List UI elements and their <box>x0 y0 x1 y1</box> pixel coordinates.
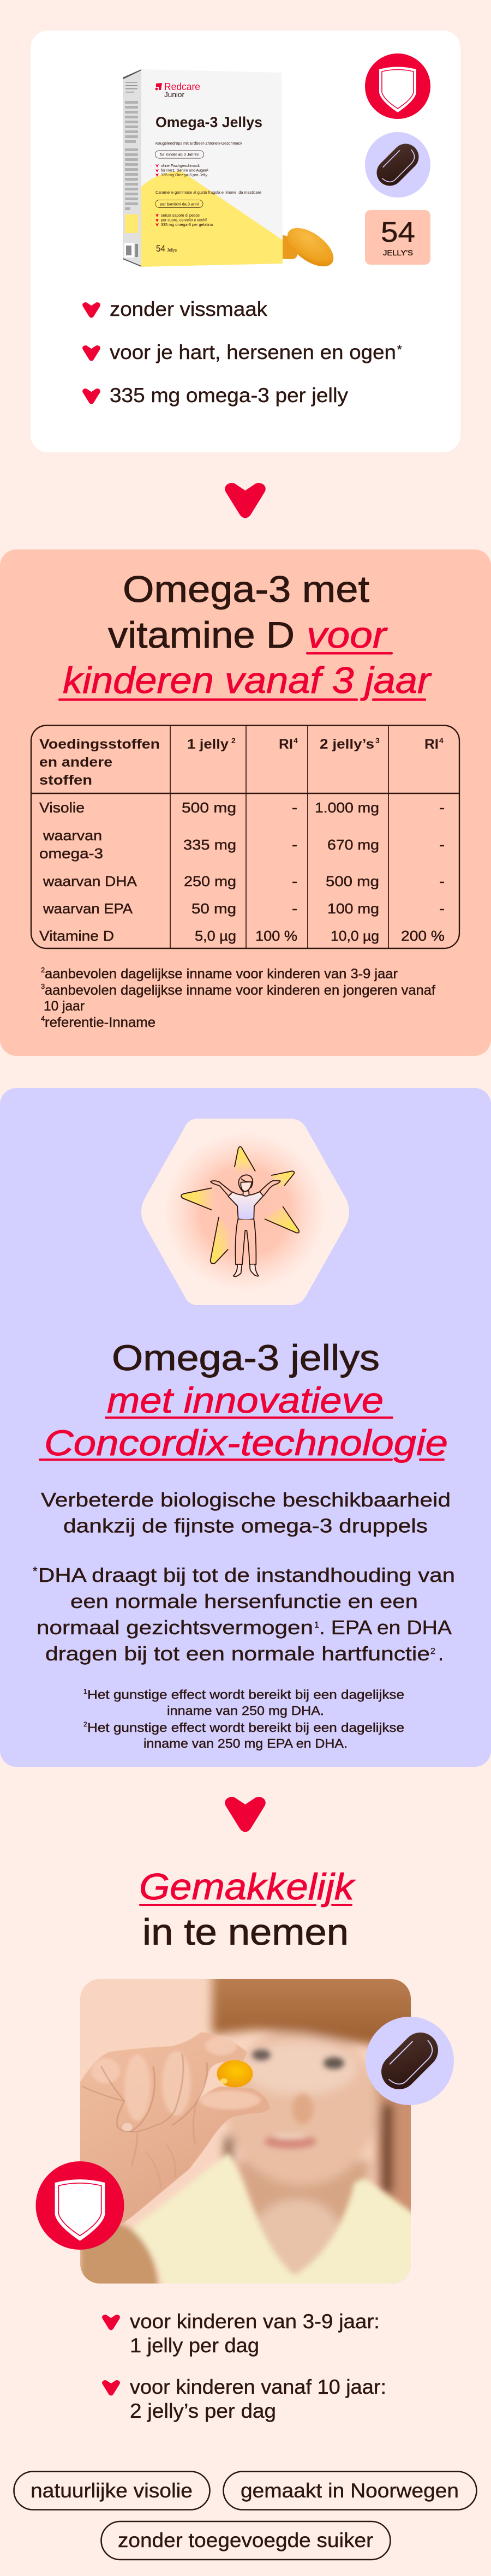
row: visolie: Visolie <box>39 799 85 816</box>
row: EPA: - <box>439 900 445 917</box>
figure <box>211 1175 280 1276</box>
text: DHA claim: dragen bij tot een normale hartfunctie <box>45 1642 430 1665</box>
heading: gemakkelijk in te nemen: in te nemen <box>142 1911 349 1953</box>
icon: hexagon with person and star <box>141 1119 349 1305</box>
row: vitamine D: 5,0 µg <box>195 928 236 944</box>
text: DHA claim: . <box>438 1642 444 1665</box>
row: omega-3: omega-3 <box>39 845 103 862</box>
row: omega-3 <box>39 827 445 862</box>
text: DHA claim: . EPA en DHA <box>319 1616 452 1639</box>
box count <box>156 243 177 254</box>
table header: stoffen <box>39 773 92 788</box>
table footnotes: referentie-Inname <box>45 1015 155 1030</box>
heading: omega-3 met vitamine D: Omega-3 met <box>123 569 369 610</box>
text: DHA claim: * <box>33 1564 38 1578</box>
box title: Omega-3 Jellys <box>155 114 262 130</box>
Italian box text: per cuore, cervello e occhi¹ <box>161 217 207 223</box>
row: EPA: - <box>292 900 297 917</box>
row: EPA <box>43 900 445 917</box>
table header <box>39 736 444 788</box>
table header: RI <box>279 737 293 752</box>
row: visolie: 500 mg <box>182 799 236 816</box>
box count: 54 <box>156 243 165 254</box>
table header: Voedingsstoffen <box>39 737 160 752</box>
Italian box text: 335 mg omega-3 per gelatina <box>161 222 213 227</box>
text: DHA claim: 2 <box>430 1647 435 1656</box>
German box text: für Herz, Gehirn und Augen¹ <box>161 168 208 172</box>
Italian box text: per bambini da 3 anni <box>160 202 199 206</box>
table header: 2 <box>231 736 236 745</box>
footnotes: effect: 1 <box>83 1688 87 1695</box>
icon: jelly badge on photo <box>366 2017 454 2105</box>
row: DHA: waarvan DHA <box>43 873 137 889</box>
row: visolie: - <box>439 799 445 816</box>
heading: omega-3 jellys met innovatieve concordix-technologie: Concordix-technologie <box>44 1423 448 1463</box>
heading: omega-3 met vitamine D: voor <box>307 614 388 656</box>
row: visolie <box>39 799 445 816</box>
row: DHA: 250 mg <box>184 873 236 889</box>
table header: 4 <box>439 736 444 745</box>
footnotes: effect: inname van 250 mg DHA. <box>167 1704 324 1718</box>
pill: zonder toegevoegde suiker <box>101 2521 391 2560</box>
row: vitamine D: Vitamine D <box>39 928 114 944</box>
row: EPA: 100 mg <box>327 900 379 917</box>
table header: 2 jelly’s <box>320 737 374 752</box>
product box illustration <box>123 69 283 267</box>
table footnotes: aanbevolen dagelijkse inname voor kinderen van 3-9 jaar <box>45 966 398 982</box>
table footnotes: aanbevolen dagelijkse inname voor kinderen en jongeren vanaf <box>45 983 435 998</box>
German box text: Kaugeleedrops mit Erdbeer-Zitronen-Geschmack <box>155 141 242 146</box>
icon: heart divider 2 <box>225 1797 266 1832</box>
text: DHA claim: DHA draagt bij tot de instandhouding van <box>38 1564 455 1586</box>
badge: 54 jelly's: JELLY'S <box>383 248 413 257</box>
table footnotes: 3 <box>41 982 45 990</box>
table header: 1 jelly <box>187 737 229 752</box>
row: EPA: waarvan EPA <box>43 900 133 917</box>
panel: product card <box>31 31 460 452</box>
pill: zonder toegevoegde suiker: zonder toegevoegde suiker <box>118 2529 373 2551</box>
table header: 3 <box>375 736 380 745</box>
row: DHA <box>43 873 445 889</box>
German box text: 335 mg Omega-3 pro Jelly <box>161 172 207 177</box>
icon: shield badge on photo <box>36 2161 124 2250</box>
footnotes: effect <box>83 1687 404 1750</box>
pill: natuurlijke visolie <box>14 2472 209 2510</box>
row: DHA: - <box>439 873 445 889</box>
row: visolie: 1.000 mg <box>315 799 379 816</box>
brand logo: Junior <box>164 90 184 99</box>
row: vitamine D: 10,0 µg <box>331 928 379 944</box>
table footnotes: 2 <box>41 966 45 974</box>
text: bioavailability: dankzij de fijnste omega-3 druppels <box>63 1515 428 1537</box>
text: DHA claim: 1 <box>314 1621 319 1630</box>
heading: omega-3 met vitamine D <box>58 569 432 701</box>
bullet: voor je hart: voor je hart, hersenen en ogen <box>110 341 396 363</box>
bullet: zonder vissmaak: zonder vissmaak <box>110 298 268 320</box>
row: omega-3: - <box>292 836 297 853</box>
bullet: 3-9 jaar dosage <box>102 2310 380 2357</box>
bullet: 3-9 jaar dosage: voor kinderen van 3-9 jaar: <box>130 2310 380 2333</box>
bullet: voor je hart: * <box>397 343 402 356</box>
jelly capsules <box>281 220 340 274</box>
bullet: 335 mg: 335 mg omega-3 per jelly <box>110 384 349 407</box>
Italian box text: senza sapore di pesce <box>161 213 200 218</box>
heading: omega-3 jellys met innovatieve concordix-technologie <box>39 1337 448 1463</box>
heading: omega-3 jellys met innovatieve concordix-technologie: met innovatieve <box>107 1380 384 1420</box>
pill: gemaakt in Noorwegen: gemaakt in Noorwegen <box>241 2479 459 2502</box>
footnotes: effect: Het gunstige effect wordt bereikt bij een dagelijkse <box>87 1687 404 1701</box>
heading: omega-3 met vitamine D: vitamine D <box>108 614 295 656</box>
row: omega-3: waarvan <box>43 827 102 844</box>
heading: omega-3 met vitamine D: kinderen vanaf 3 jaar <box>63 660 432 701</box>
panel: concordix technology <box>0 1088 491 1767</box>
nutrition table <box>31 726 459 948</box>
table header: 4 <box>294 736 298 745</box>
footnotes: effect: 2 <box>83 1720 87 1728</box>
table footnotes <box>41 966 435 1030</box>
text: DHA claim: normaal gezichtsvermogen <box>37 1616 313 1639</box>
Italian box text <box>155 190 261 227</box>
heading: gemakkelijk in te nemen: Gemakkelijk <box>139 1866 356 1908</box>
text: bioavailability: Verbeterde biologische beschikbaarheid <box>41 1489 451 1511</box>
row: omega-3: - <box>439 836 445 853</box>
row: vitamine D <box>39 928 445 944</box>
row: vitamine D: 100 % <box>255 928 297 944</box>
row: DHA: - <box>292 873 297 889</box>
German box text: für Kinder ab 3 Jahren <box>160 152 199 157</box>
row: omega-3: 335 mg <box>183 836 236 853</box>
panel: nutrition <box>0 549 491 1056</box>
pill: gemaakt in Noorwegen <box>224 2472 477 2510</box>
brand logo: Redcare <box>164 81 200 92</box>
row: EPA: 50 mg <box>191 900 236 917</box>
table footnotes: 10 jaar <box>44 999 85 1014</box>
icon: jelly badge <box>365 132 430 198</box>
row: visolie: - <box>292 799 297 816</box>
jelly in fingers <box>217 2060 253 2088</box>
bullet: vanaf 10 jaar dosage: voor kinderen vanaf 10 jaar: <box>130 2376 386 2398</box>
bullet: vanaf 10 jaar dosage <box>102 2376 386 2422</box>
pill: natuurlijke visolie: natuurlijke visolie <box>31 2479 193 2502</box>
badge: 54 jelly's <box>365 210 430 265</box>
German box text <box>155 141 242 177</box>
table header: RI <box>424 737 439 752</box>
heading: omega-3 jellys met innovatieve concordix-technologie: Omega-3 jellys <box>112 1337 380 1378</box>
text: bioavailability <box>41 1489 451 1537</box>
box count: Jellys <box>167 248 177 253</box>
bullet: vanaf 10 jaar dosage: 2 jelly’s per dag <box>130 2400 276 2422</box>
photo: child holding jelly <box>77 1970 420 2292</box>
brand logo <box>155 81 200 99</box>
row: vitamine D: 200 % <box>401 928 445 944</box>
text: DHA claim <box>33 1564 455 1665</box>
badge: 54 jelly's: 54 <box>381 217 415 248</box>
icon: shield badge <box>365 53 430 119</box>
text: DHA claim: een normale hersenfunctie en een <box>70 1590 418 1612</box>
row: DHA: 500 mg <box>326 873 379 889</box>
footnotes: effect: Het gunstige effect wordt bereikt bij een dagelijkse <box>87 1720 404 1735</box>
icon: heart divider 1 <box>225 483 266 518</box>
bullet: 3-9 jaar dosage: 1 jelly per dag <box>130 2334 259 2357</box>
table footnotes: 4 <box>41 1014 45 1023</box>
German box text: ohne Fischgeschmack <box>161 163 200 168</box>
table header: en andere <box>39 755 112 770</box>
row: omega-3: 670 mg <box>327 836 379 853</box>
Italian box text: Caramelle gommose al gusto fragola e limone, da masticare <box>155 190 261 195</box>
footnotes: effect: inname van 250 mg EPA en DHA. <box>143 1736 348 1750</box>
heading: gemakkelijk in te nemen <box>139 1866 356 1953</box>
